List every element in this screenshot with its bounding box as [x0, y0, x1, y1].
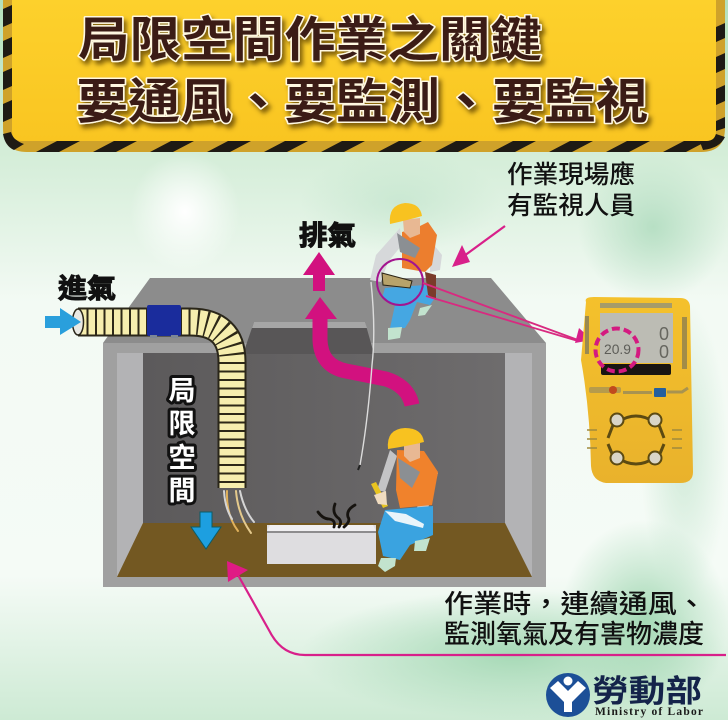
callout: supervisor: [507, 160, 635, 220]
right hazard stripes: [700, 23, 725, 150]
label: 局限空間: 間: [168, 476, 196, 506]
roof opening: [243, 322, 374, 354]
confined space box: [103, 278, 546, 587]
dark strip: [601, 364, 671, 375]
callout: continuous ventilation: 作業時，連續通風、: [444, 589, 706, 619]
label: 局限空間: 空: [168, 443, 196, 473]
icon: fumes: [318, 504, 355, 527]
title: [76, 14, 648, 129]
back wall: [143, 353, 505, 523]
status buttons: [589, 387, 621, 393]
worker on roof: [370, 203, 442, 340]
label: 排氣: 排氣: [299, 221, 356, 251]
logo: Ministry of Labor: Ministry of Labor: [595, 706, 703, 718]
callout: continuous ventilation: [444, 589, 706, 649]
callout: supervisor: 有監視人員: [507, 192, 635, 220]
logo: Ministry of Labor: [546, 673, 703, 718]
pointer lines to gas detector: [423, 283, 578, 341]
exhaust arrow: [303, 252, 335, 291]
inlet arrow: [45, 308, 81, 335]
header banner: [3, 0, 725, 152]
exhaust flow arrow: [305, 297, 412, 405]
title: 局限空間作業之關鍵: [78, 14, 542, 67]
left wall: [117, 353, 143, 577]
left hazard stripes: [3, 5, 24, 150]
air streams: [224, 491, 254, 533]
arrow to floor: [227, 561, 726, 655]
gas detector: [581, 297, 693, 483]
screen: [600, 313, 673, 363]
callout: continuous ventilation: 監測氧氣及有害物濃度: [444, 619, 704, 649]
label: 局限空間: 限: [168, 409, 196, 439]
fan: [147, 305, 181, 338]
logo: Ministry of Labor: 勞動部: [592, 674, 702, 709]
label: 局限空間: [168, 376, 196, 506]
dashed highlight: [596, 328, 638, 372]
callout: supervisor: 作業現場應: [507, 160, 635, 189]
screen readings: 20.9: [604, 341, 631, 357]
title: 要通風、要監測、要監視: [76, 76, 648, 129]
work block: [267, 525, 376, 564]
gas detector: 0: [659, 342, 669, 362]
arrow to supervisor: [452, 226, 505, 267]
right wall: [505, 353, 532, 577]
floor: [117, 523, 532, 577]
blue fresh-air arrow in space: [191, 512, 221, 549]
sampling tube: [358, 282, 374, 470]
label: 局限空間: 局: [168, 376, 196, 406]
top face: [103, 278, 546, 343]
keypad: [608, 416, 664, 464]
highlight circle on detector: [377, 259, 423, 305]
front frame: [103, 343, 546, 587]
bottom hazard stripes: [36, 141, 707, 152]
label: 進氣: 進氣: [58, 274, 116, 304]
gas detector: 0: [659, 324, 669, 344]
hose: [72, 309, 232, 488]
arrow tip to detector: [575, 328, 592, 343]
worker in space: [371, 428, 438, 572]
logo mark: [546, 673, 590, 717]
